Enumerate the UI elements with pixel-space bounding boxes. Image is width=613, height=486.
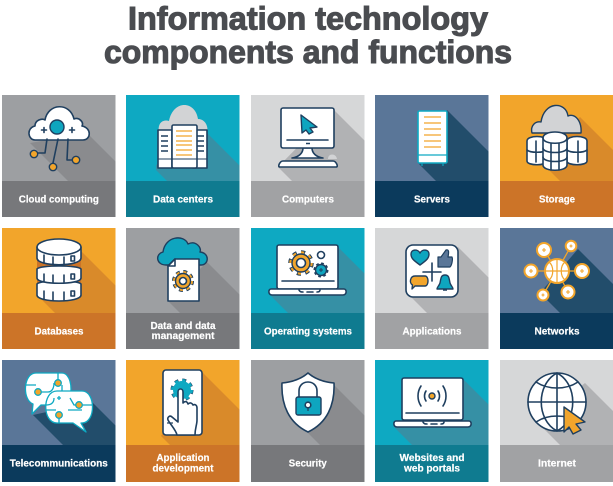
label: Servers xyxy=(414,194,450,206)
label: Data centers xyxy=(153,194,213,206)
label: management xyxy=(152,331,215,342)
label: Cloud computing xyxy=(19,194,99,206)
label: Storage xyxy=(539,194,575,206)
label: Security xyxy=(289,459,327,470)
icon: database stack xyxy=(37,239,81,301)
label xyxy=(400,453,464,474)
icon: network nodes xyxy=(524,241,589,300)
panel: storage xyxy=(500,95,613,217)
icon: laptop with signal xyxy=(394,378,471,427)
panel: websites and web portals xyxy=(375,360,488,482)
label: Applications xyxy=(402,327,462,338)
label: Operating systems xyxy=(264,327,352,338)
panel: telecommunications xyxy=(2,360,116,482)
label: development xyxy=(152,464,214,474)
panel: application development xyxy=(126,360,240,482)
panel: security xyxy=(251,360,364,482)
icon: laptop with gears xyxy=(269,245,346,295)
panel: operating systems xyxy=(251,228,364,349)
label: Data and data xyxy=(150,321,216,332)
icon: cloud storage xyxy=(527,105,587,170)
title xyxy=(104,0,512,70)
label: Networks xyxy=(534,327,580,338)
panel: cloud computing xyxy=(2,95,116,217)
panel: applications xyxy=(375,228,488,349)
icon: phone with touch gear xyxy=(163,370,202,435)
icon: chat bubbles xyxy=(25,373,92,432)
icon: cloud document gear xyxy=(158,238,207,301)
panel: computers xyxy=(251,95,364,217)
icon: server xyxy=(418,111,447,166)
label: Computers xyxy=(282,194,334,206)
icon: cloud with nodes xyxy=(29,107,89,171)
panel: servers xyxy=(375,95,488,217)
label: Internet xyxy=(538,459,577,470)
icon: shield with lock xyxy=(282,373,334,432)
label: Websites and xyxy=(400,453,464,464)
label xyxy=(152,453,214,474)
icon: app symbols xyxy=(406,245,458,297)
panel: databases xyxy=(2,228,116,349)
label: web portals xyxy=(403,464,460,474)
icon: globe with cursor xyxy=(528,373,586,434)
label: Telecommunications xyxy=(10,459,108,470)
panel: data centers xyxy=(126,95,240,217)
label xyxy=(150,321,216,342)
label: Databases xyxy=(34,327,84,338)
panel: networks xyxy=(500,228,613,349)
panel: data and data management xyxy=(126,228,240,349)
label: Application xyxy=(156,453,210,464)
title: components and functions xyxy=(104,34,512,70)
panel: internet xyxy=(500,360,613,482)
icon: desktop computer xyxy=(279,108,337,167)
icon: data center xyxy=(158,105,207,168)
title: Information technology xyxy=(128,0,488,36)
